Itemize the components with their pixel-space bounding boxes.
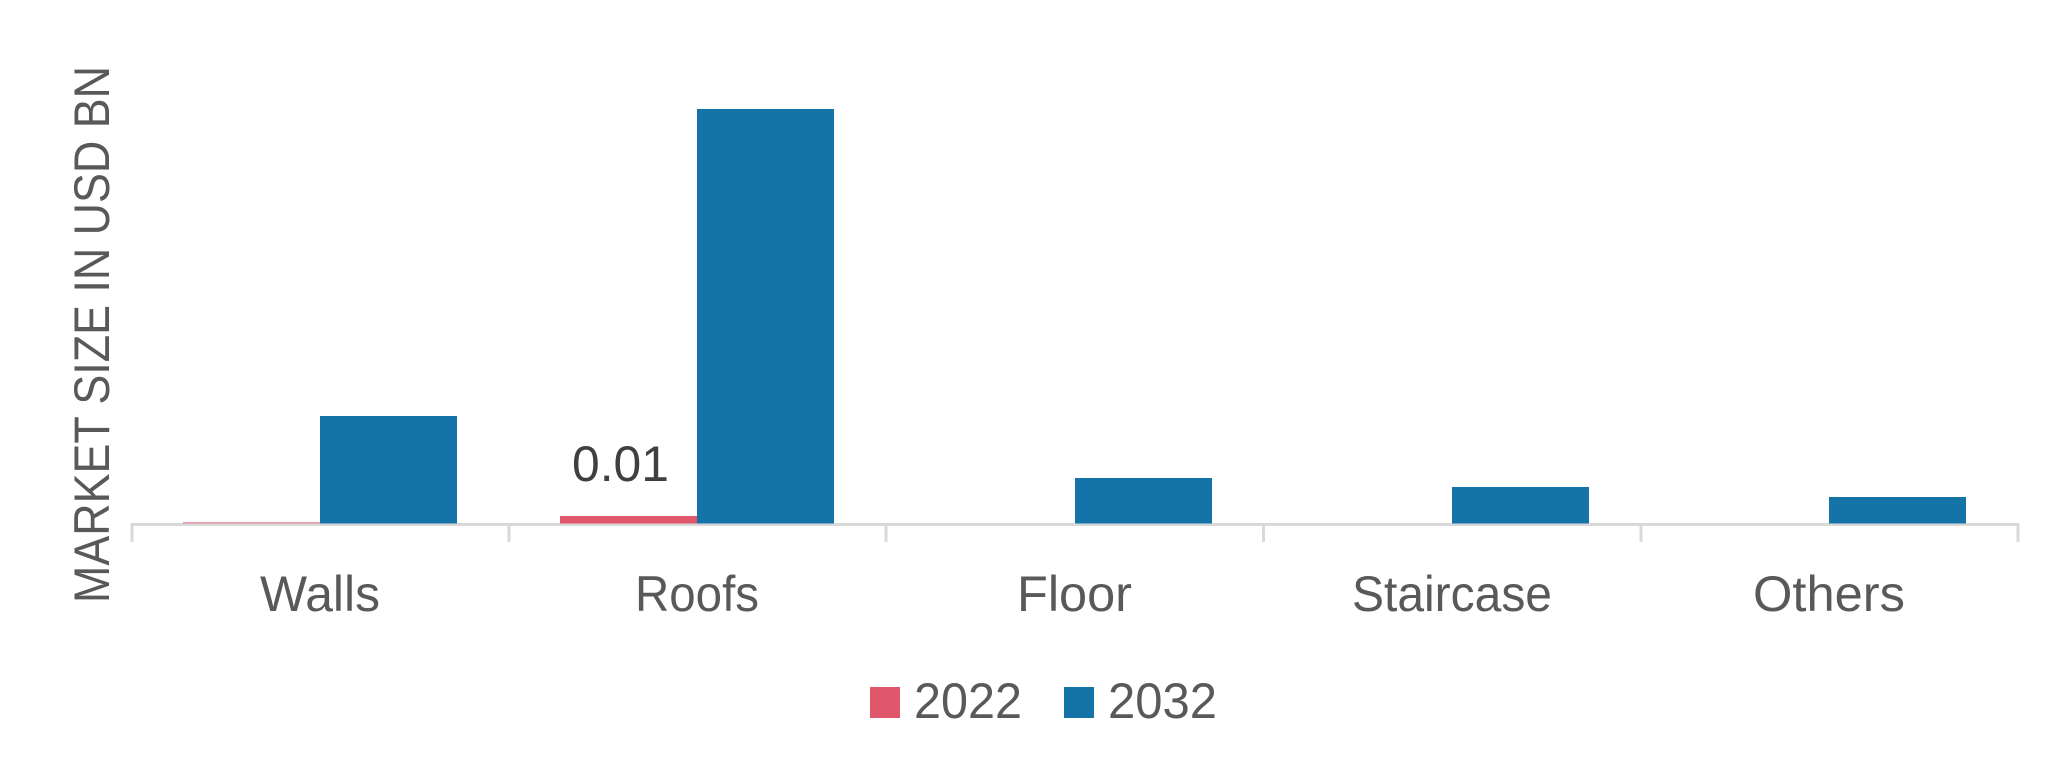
category labels: Others (1753, 566, 1905, 622)
category labels: Floor (1017, 566, 1132, 622)
category labels: Staircase (1352, 566, 1552, 622)
category labels: Walls (260, 566, 380, 622)
category labels: Roofs (635, 566, 759, 622)
data label: roofs 2022: 0.01 (572, 436, 669, 492)
y axis title: MARKET SIZE IN USD BN (64, 66, 120, 603)
legend item: 2022: 2022 (914, 673, 1022, 729)
series 2032 bars (320, 109, 1966, 524)
x axis with category ticks (130, 523, 2020, 542)
category labels (260, 566, 1905, 622)
legend (870, 673, 1217, 729)
legend item: 2022 (870, 673, 1022, 729)
series 2022 bars (183, 516, 697, 524)
legend item: 2032: 2032 (1108, 673, 1217, 729)
